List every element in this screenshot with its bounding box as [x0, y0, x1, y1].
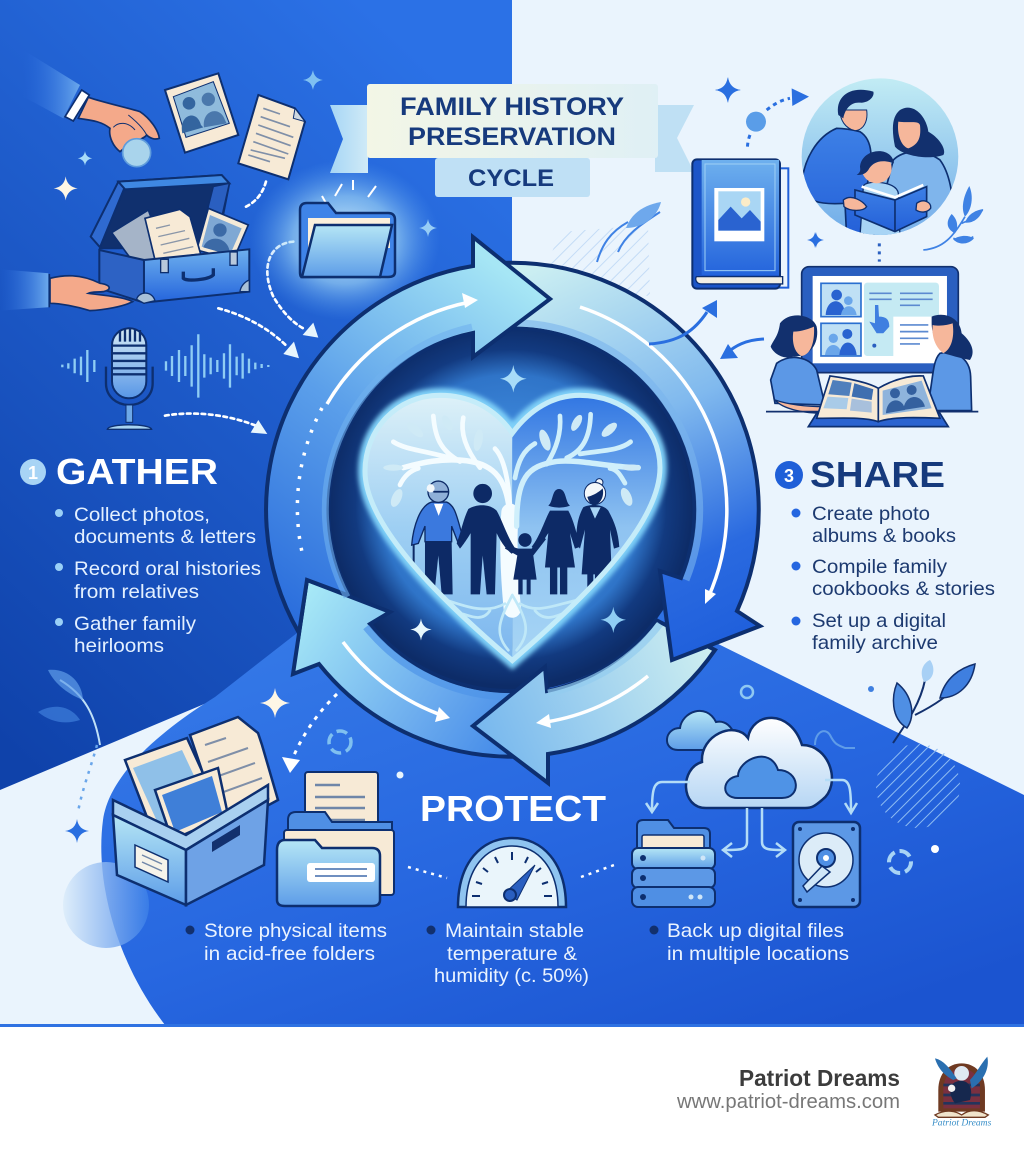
figure: mother — [532, 489, 580, 594]
step number 3: 3 — [784, 466, 794, 486]
illustration: protect decor — [282, 686, 939, 873]
ribbon: right — [655, 105, 694, 172]
icon: family reading — [802, 78, 958, 237]
icon: hard drive — [793, 822, 860, 907]
text: climate bullet: Maintain stable — [445, 920, 584, 942]
icon: humidity gauge — [458, 838, 566, 907]
panel: protect background — [101, 500, 1024, 1025]
sparkle — [715, 77, 740, 103]
sparkles — [54, 71, 322, 200]
arrow: start to gather — [266, 237, 550, 633]
sparkles: background — [65, 70, 823, 843]
icon: acid-free folders — [277, 772, 394, 906]
ribbon: left — [330, 105, 368, 173]
text: gather bullets: Record oral histories — [74, 558, 261, 580]
text: share bullets — [792, 503, 995, 654]
text: gather bullets — [55, 504, 261, 657]
icon: letter document — [238, 95, 305, 179]
text: climate bullet: humidity (c. 50%) — [434, 965, 589, 987]
connector dots — [875, 243, 884, 262]
icon: sync arrows — [646, 780, 857, 857]
icon: small cloud — [667, 711, 735, 750]
text: share bullets: Set up a digital — [812, 610, 946, 632]
icon: server folder stack — [632, 820, 715, 907]
icon: digital archive monitor — [802, 267, 958, 373]
centre disc — [329, 328, 693, 692]
text: climate bullet — [426, 920, 589, 987]
heart glow — [365, 395, 660, 660]
cycle label: CYCLE — [468, 165, 554, 192]
icon: sound waves — [62, 334, 268, 398]
text: climate bullet: temperature & — [447, 943, 577, 965]
icon: main cloud — [686, 718, 832, 808]
arrow: gather to share — [500, 263, 760, 660]
leaves — [383, 413, 641, 509]
heading: share — [775, 454, 945, 495]
arrow: protect to gather — [293, 580, 530, 757]
text: store bullet — [186, 920, 387, 965]
title banner — [330, 84, 694, 197]
heart with family tree — [360, 365, 666, 664]
title text: FAMILY HISTORY — [400, 93, 624, 121]
icon: open chest — [91, 175, 249, 303]
decorative pale circle — [63, 862, 149, 948]
cycle box — [435, 158, 590, 197]
heart outline — [365, 395, 660, 660]
figure: grandfather — [412, 481, 462, 594]
arrow: share monitor curved — [720, 339, 764, 359]
heading: protect: PROTECT — [420, 788, 606, 829]
dotted connectors — [408, 864, 617, 878]
arrow: share book curved — [649, 300, 717, 344]
illustration: leaf on left — [38, 670, 100, 745]
title box — [367, 84, 658, 158]
icon: patriot dreams logo: Patriot Dreams — [931, 1117, 992, 1127]
text: gather bullets: heirlooms — [74, 635, 164, 657]
panel base line — [0, 1024, 1024, 1027]
panel: cycle diagram — [266, 237, 760, 783]
dotted flow arrows — [165, 182, 305, 426]
figure: father — [457, 484, 517, 594]
icon: leaf sprig — [923, 186, 983, 250]
text: store bullet: Store physical items — [204, 920, 387, 942]
icon: person left — [771, 315, 825, 413]
text: share bullets: Compile family — [812, 556, 947, 578]
icon: lower hand — [0, 269, 133, 311]
sparkles — [410, 365, 626, 641]
illustration: share — [692, 77, 983, 427]
text: backup bullet — [650, 920, 849, 965]
share title: SHARE — [810, 454, 945, 495]
icon: photo book — [692, 159, 788, 289]
title text line 2: PRESERVATION — [408, 123, 616, 151]
dotted link and node — [746, 88, 809, 151]
step badge 1 — [20, 459, 46, 485]
heading: gather — [20, 451, 218, 492]
text: backup bullet: Back up digital files — [667, 920, 844, 942]
icon: person right — [902, 315, 973, 411]
icon: glowing folder — [250, 160, 440, 320]
gather title: GATHER — [56, 451, 218, 492]
step badge 3 — [775, 461, 803, 489]
icon: polaroid photo — [165, 73, 238, 153]
arrow: share to protect — [473, 620, 715, 783]
arrowheads — [251, 323, 318, 434]
panel: gather background — [0, 0, 512, 790]
illustration: plant on right — [893, 660, 975, 743]
text: store bullet: in acid-free folders — [204, 943, 375, 965]
icon: patriot dreams logo — [931, 1057, 992, 1127]
footer brand text — [676, 1065, 900, 1113]
text: gather bullets: Collect photos, — [74, 504, 210, 526]
heart body — [360, 392, 666, 664]
text: share bullets: Create photo — [812, 503, 930, 525]
footer brand text: Patriot Dreams — [739, 1065, 900, 1091]
footer brand text: www.patriot-dreams.com — [676, 1090, 900, 1113]
text: share bullets: cookbooks & stories — [812, 578, 995, 600]
tree — [393, 414, 638, 650]
sparkle — [808, 232, 824, 248]
icon: upper hand with lens — [23, 50, 159, 167]
dotted guide on pale area — [78, 745, 97, 812]
text: backup bullet: in multiple locations — [667, 943, 849, 965]
text: share bullets: family archive — [812, 632, 938, 654]
hatched accent with sprig — [551, 202, 661, 296]
icon: open album — [766, 376, 978, 427]
hatched circle — [876, 744, 960, 828]
text: gather bullets: documents & letters — [74, 526, 256, 548]
text: share bullets: albums & books — [812, 525, 956, 547]
icon: archive box — [113, 717, 278, 905]
icon: microphone — [106, 328, 153, 429]
illustration: gather collection — [0, 50, 322, 434]
step number 1: 1 — [28, 463, 38, 483]
text: gather bullets: from relatives — [74, 581, 199, 603]
figure: child — [505, 533, 546, 594]
figure: grandmother — [576, 479, 619, 590]
text: gather bullets: Gather family — [74, 613, 196, 635]
